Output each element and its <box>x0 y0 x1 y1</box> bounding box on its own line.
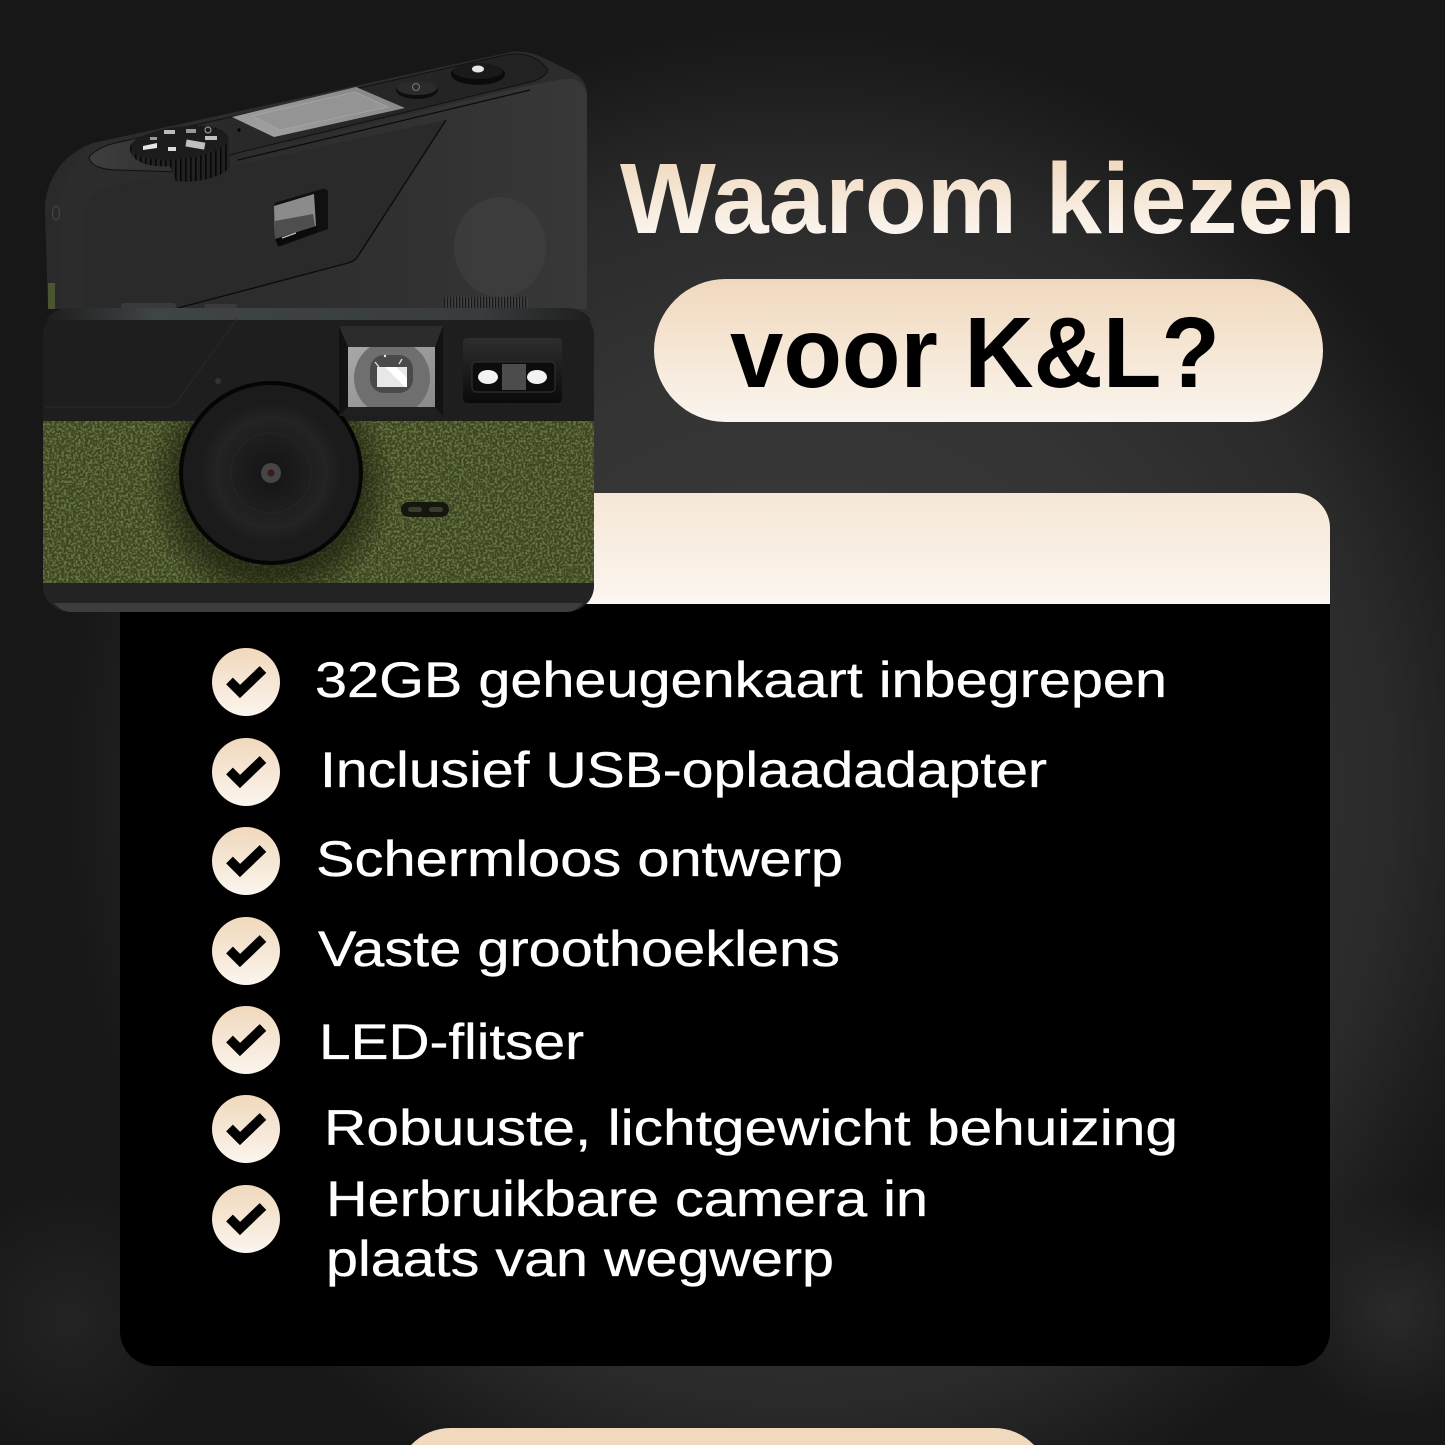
item: LED-flitser <box>212 1006 584 1074</box>
item: Herbruikbare camera in plaats van wegwerp: plaats van wegwerp <box>326 1231 834 1287</box>
top strip <box>46 308 591 320</box>
rear panel line <box>178 120 446 308</box>
item: Herbruikbare camera in plaats van wegwerp: Herbruikbare camera in <box>326 1171 928 1227</box>
item: Robuuste, lichtgewicht behuizing <box>212 1095 1178 1163</box>
camera body <box>45 52 587 309</box>
camera: front view <box>43 308 594 612</box>
bottom button <box>411 1428 1034 1445</box>
flash <box>463 338 562 403</box>
green leather <box>43 421 594 583</box>
item: Inclusief USB-oplaadadapter <box>212 738 1047 806</box>
rear small buttons <box>121 303 176 309</box>
inner rear panel <box>85 120 446 308</box>
item: Vaste groothoeklens: Vaste groothoeklens <box>318 921 840 977</box>
lens <box>179 381 363 565</box>
item: Vaste groothoeklens <box>212 917 840 985</box>
item: LED-flitser: LED-flitser <box>319 1014 584 1070</box>
green edge <box>48 283 55 309</box>
speaker <box>401 502 449 517</box>
accent groove <box>238 90 530 160</box>
rear face <box>85 79 587 309</box>
item: Schermloos ontwerp <box>212 827 843 895</box>
panel line <box>45 319 237 407</box>
pill heading: voor K&L?: voor K&L? <box>730 297 1220 409</box>
bottom lip <box>43 583 594 612</box>
shutter button <box>451 63 505 85</box>
rear viewfinder window <box>274 189 328 246</box>
mode dial <box>130 122 230 182</box>
panel: features <box>120 493 1330 1366</box>
LCD screen <box>232 87 405 137</box>
power button <box>396 81 438 99</box>
item: 32GB geheugenkaart inbegrepen <box>212 648 1167 716</box>
faint circle <box>454 197 546 297</box>
item: 32GB geheugenkaart inbegrepen: 32GB geheugenkaart inbegrepen <box>315 652 1167 708</box>
rear second button <box>204 304 237 309</box>
status dot <box>237 128 241 132</box>
top plate <box>89 54 548 172</box>
panel top band <box>120 493 1330 604</box>
item: Inclusief USB-oplaadadapter: Inclusief USB-oplaadadapter <box>320 742 1047 798</box>
sensor dot <box>215 378 221 384</box>
title: Waarom kiezen: Waarom kiezen <box>620 143 1356 255</box>
side rim <box>45 143 93 309</box>
body <box>43 308 594 612</box>
front viewfinder <box>339 326 443 416</box>
side screw <box>52 206 60 220</box>
item: Schermloos ontwerp: Schermloos ontwerp <box>316 831 843 887</box>
rear knurled wheel <box>444 297 528 309</box>
item: Robuuste, lichtgewicht behuizing: Robuuste, lichtgewicht behuizing <box>324 1100 1178 1156</box>
bottom highlight <box>54 603 583 612</box>
panel body <box>120 604 1330 1366</box>
pill heading: voor K&L? <box>654 279 1323 422</box>
item: Herbruikbare camera in plaats van wegwerp <box>212 1171 928 1287</box>
camera: rear view <box>45 52 587 309</box>
